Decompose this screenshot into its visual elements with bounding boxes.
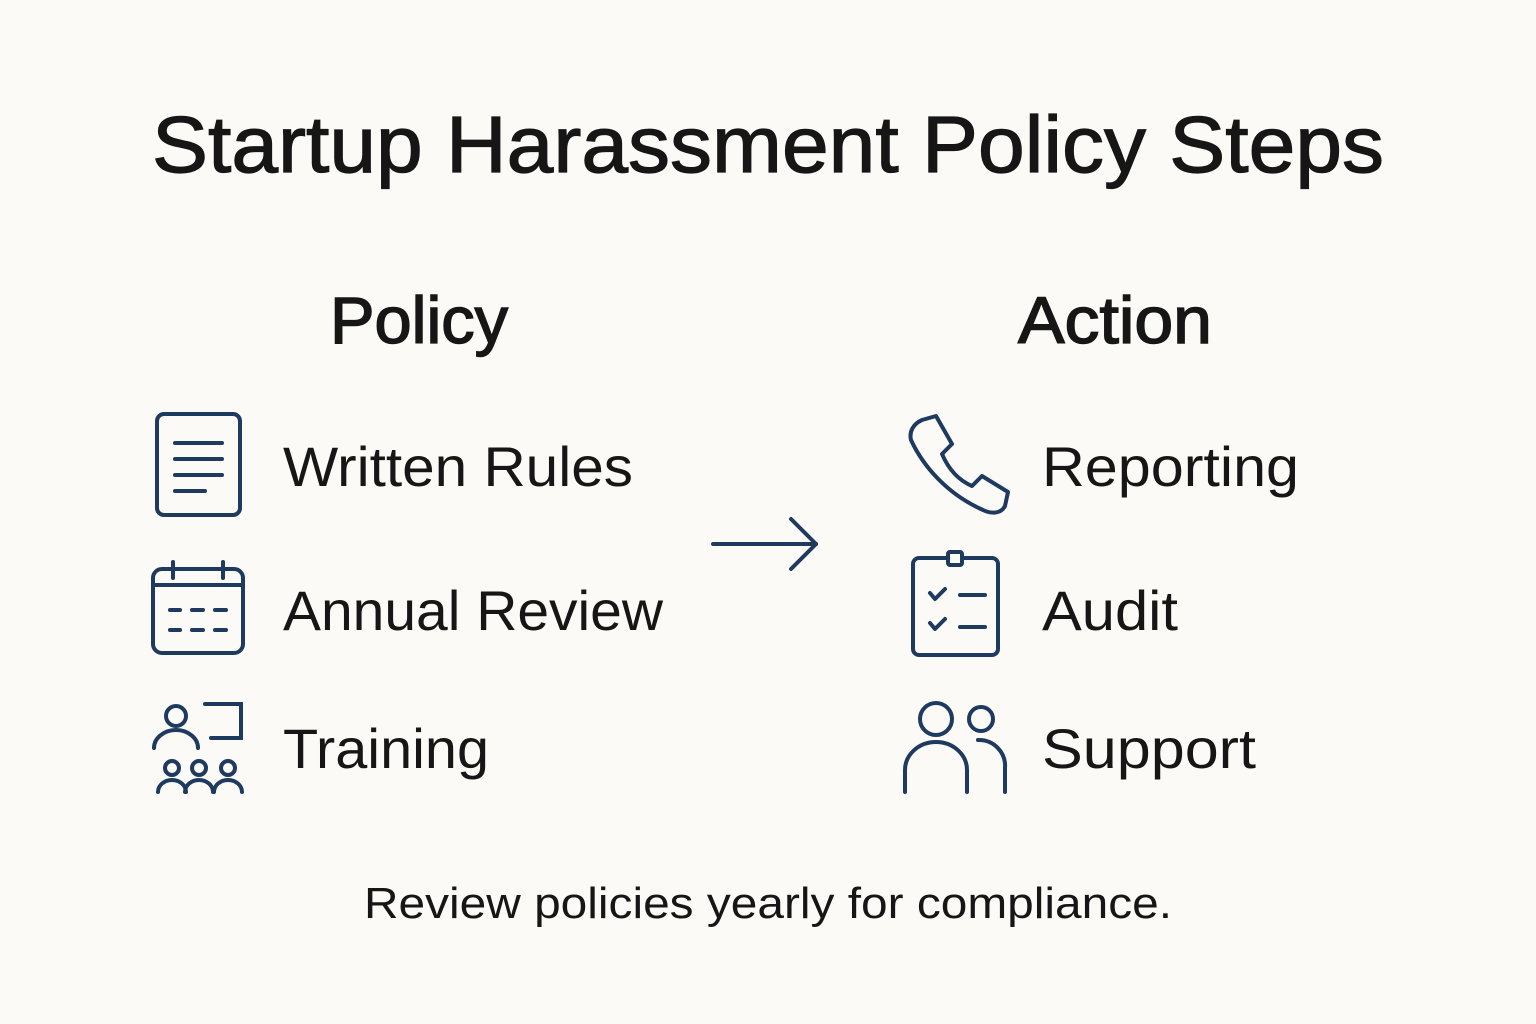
text: training: Training [283,717,489,780]
heading: policy: Policy [330,283,508,357]
icon: calendar [153,562,243,653]
icon: training [154,704,242,792]
icon: clipboard [913,552,998,655]
footer note: Review policies yearly for compliance. [364,879,1172,928]
text: written rules: Written Rules [283,435,633,498]
text: annual review: Annual Review [283,579,664,642]
icon: support [905,703,1005,792]
text: reporting: Reporting [1042,435,1299,498]
arrow [713,519,816,569]
icon: document [157,414,240,515]
icon: phone [910,416,1008,513]
text: support: Support [1042,717,1256,780]
title: Startup Harassment Policy Steps [152,100,1384,189]
heading: action: Action [1018,283,1212,357]
text: audit: Audit [1042,579,1178,642]
